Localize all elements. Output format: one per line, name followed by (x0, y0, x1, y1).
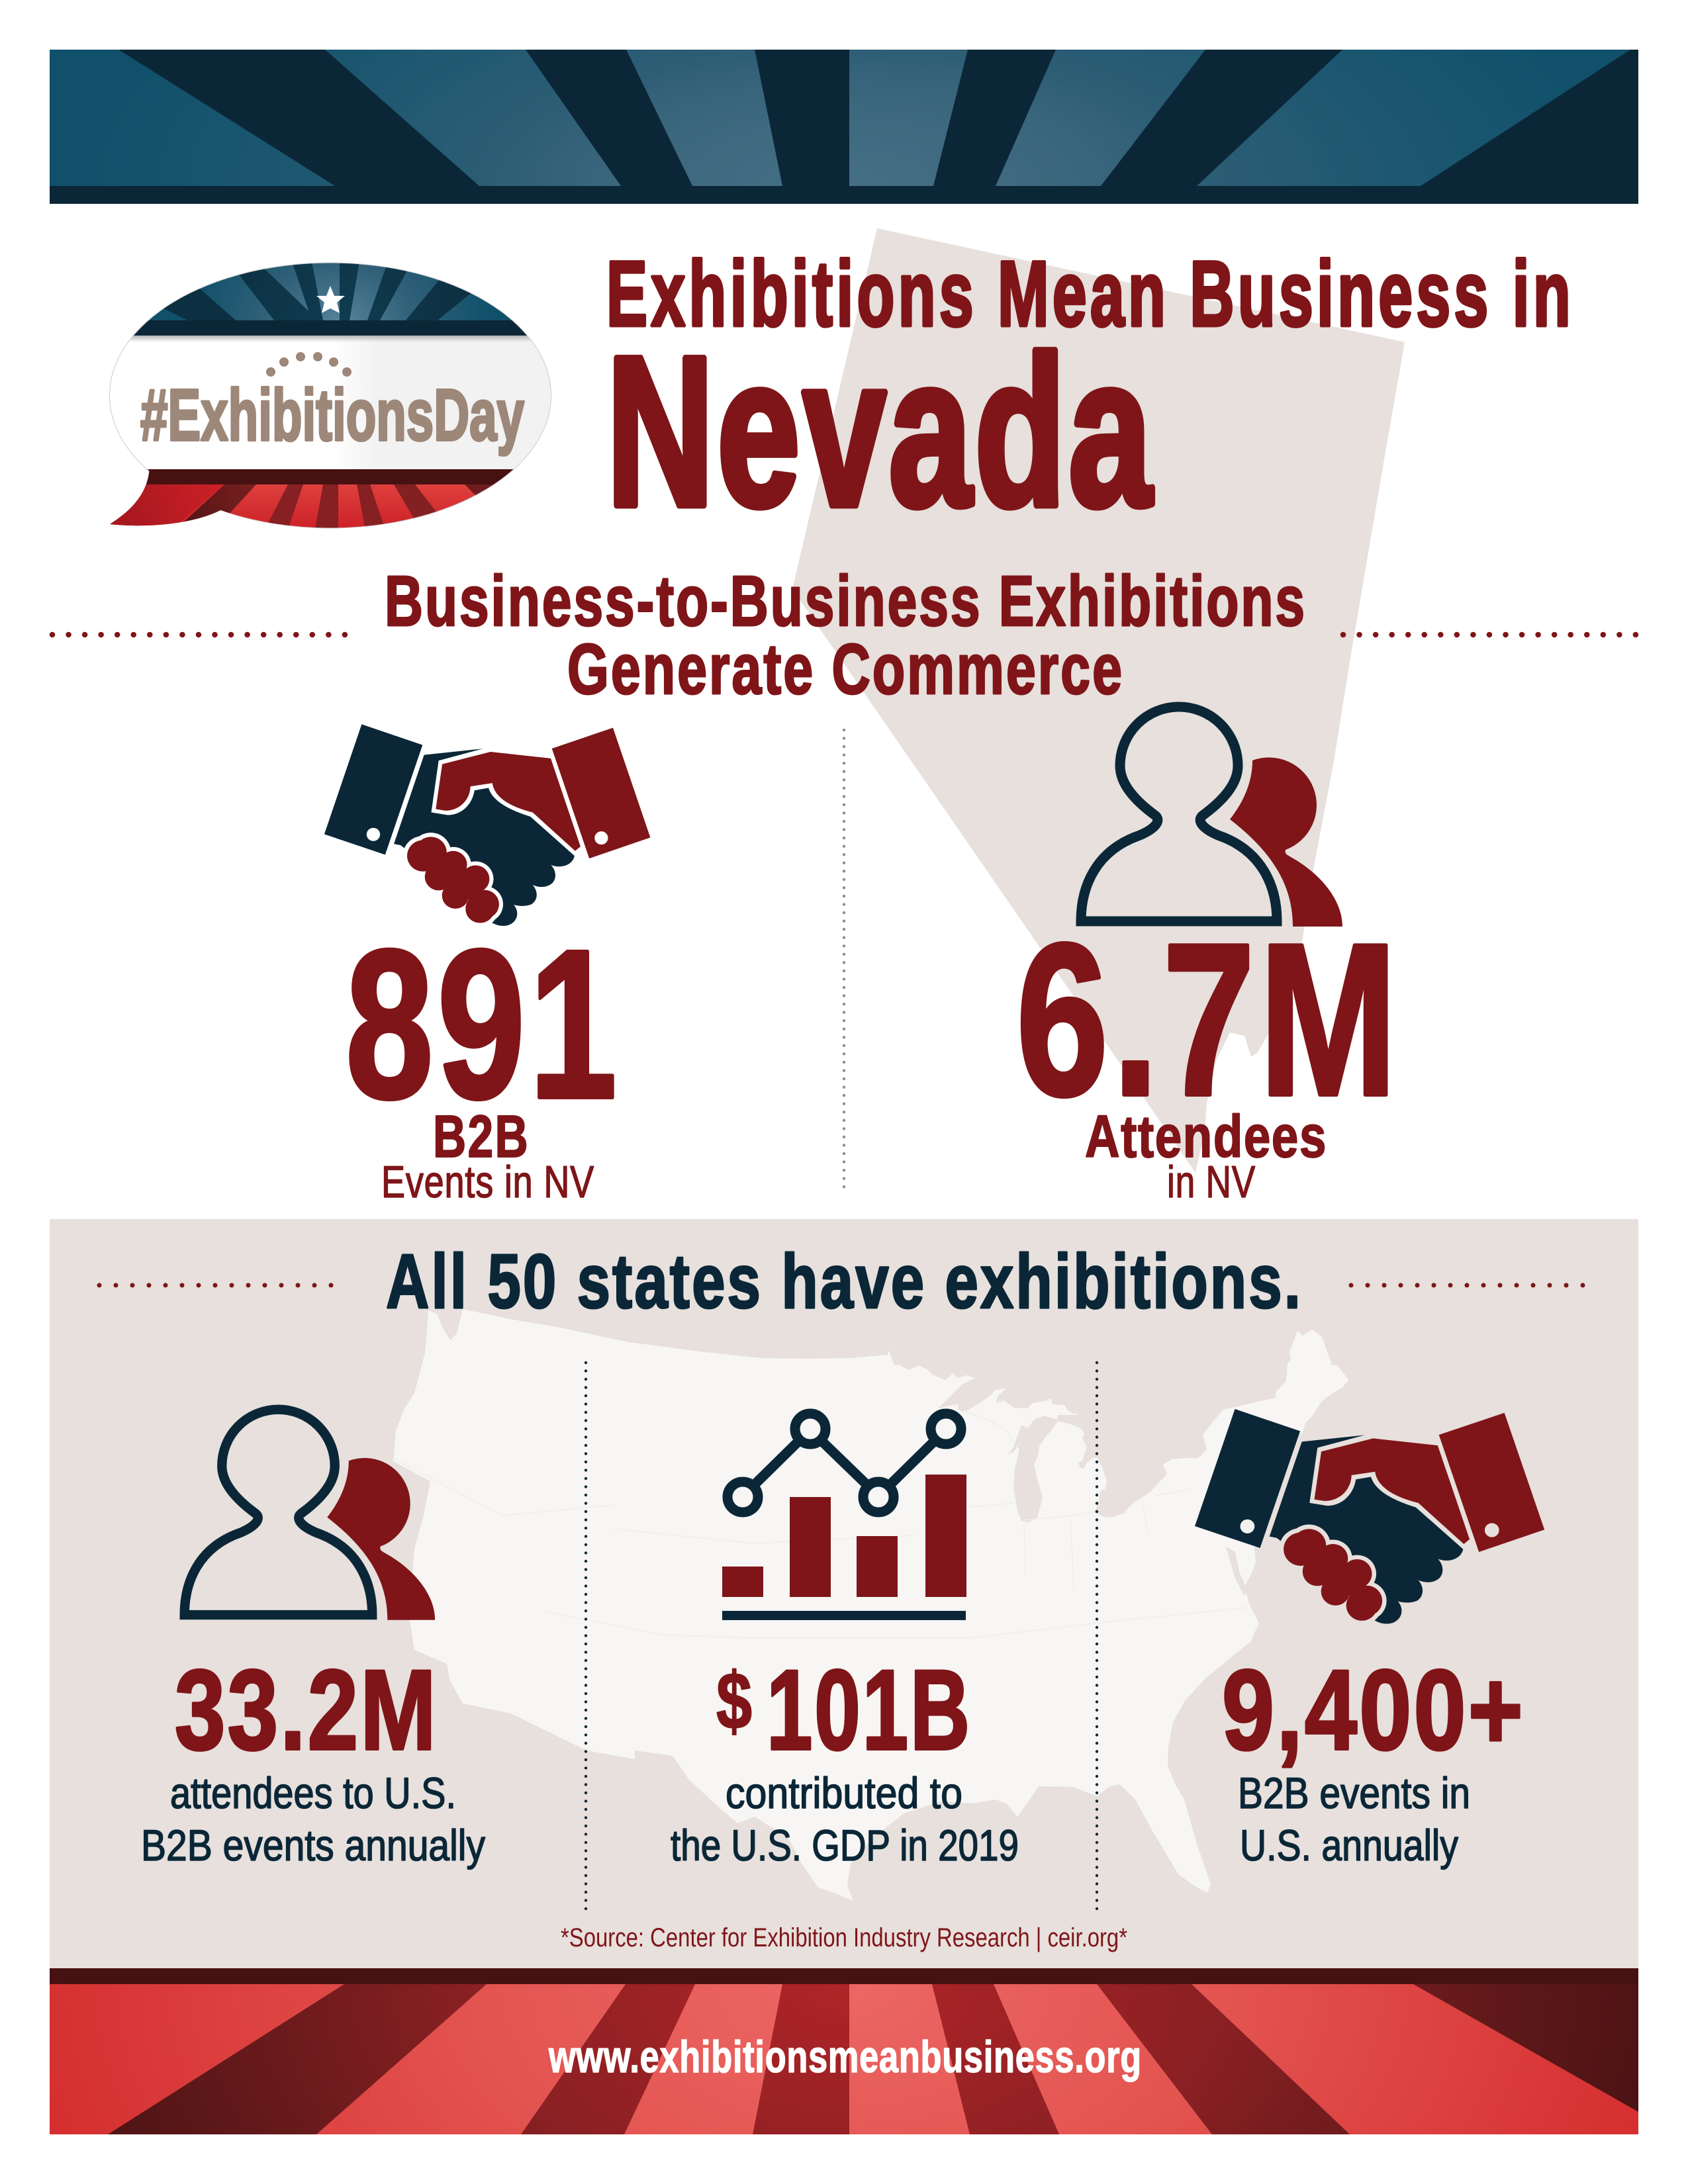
#ExhibitionsDay speech bubble badge (106, 261, 556, 533)
dotted divider left (52, 632, 346, 637)
stat: 891 B2B events in NV: Events in NV (381, 1157, 594, 1207)
stat: 9,400+ events (1222, 1647, 1525, 1870)
column divider left (585, 1363, 587, 1910)
website URL: www.exhibitionsmeanbusiness.org (548, 2032, 1142, 2082)
section heading: Business-to-Business Exhibitions (385, 561, 1307, 641)
dotted divider left (99, 1283, 332, 1288)
hashtag text: #ExhibitionsDay (140, 375, 524, 456)
stat: 9,400+ events: 9,400+ (1222, 1647, 1525, 1774)
stat: 9,400+ events: U.S. annually (1240, 1821, 1458, 1870)
source note: *Source: Center for Exhibition Industry Research | ceir.org* (561, 1923, 1127, 1952)
stat: 6.7M attendees in NV: in NV (1167, 1157, 1256, 1207)
icon: people (U.S. attendees) (185, 1410, 435, 1620)
section heading (385, 561, 1307, 709)
stat: $101B GDP: contributed to (726, 1768, 962, 1817)
Nevada state silhouette (792, 228, 1405, 1173)
stat: $101B GDP: the U.S. GDP in 2019 (671, 1821, 1019, 1870)
dotted divider right (1351, 1283, 1584, 1288)
column divider right (1096, 1363, 1098, 1910)
stat: 891 B2B events in NV: 891 (346, 905, 621, 1142)
stat: 6.7M attendees in NV: 6.7M (1016, 898, 1401, 1141)
stat: $101B GDP (671, 1647, 1019, 1870)
stat: 6.7M attendees in NV (1016, 898, 1401, 1207)
stat: 33.2M attendees (141, 1647, 485, 1870)
stat: 33.2M attendees: B2B events annually (141, 1821, 485, 1870)
stat: $101B GDP: 101B (767, 1647, 972, 1774)
stat: $101B GDP: $ (716, 1656, 752, 1746)
footer banner with red sunburst (50, 1968, 1638, 2134)
vertical dotted divider (843, 730, 845, 1189)
stat: 891 B2B events in NV (346, 905, 621, 1207)
top banner with blue sunburst (50, 50, 1638, 204)
section heading: Generate Commerce (567, 629, 1124, 709)
icon: star (316, 286, 345, 313)
panel: all 50 states (50, 1219, 1638, 1968)
stat: 9,400+ events: B2B events in (1238, 1768, 1470, 1817)
dotted divider right (1343, 632, 1636, 637)
white notch under the bubble tail (110, 510, 278, 529)
dotted arc above hashtag (266, 352, 352, 377)
stat: 33.2M attendees: 33.2M (175, 1647, 438, 1774)
stat: 891 B2B events in NV: B2B (433, 1104, 530, 1170)
icon: people (Nevada attendees) (1081, 707, 1342, 927)
stat: 33.2M attendees: attendees to U.S. (170, 1768, 456, 1817)
heading: all 50 states: All 50 states have exhibitions. (386, 1238, 1303, 1324)
stat: 6.7M attendees in NV: Attendees (1085, 1104, 1327, 1170)
title: Nevada: Nevada (606, 313, 1154, 551)
icon: bar chart with line (722, 1414, 966, 1620)
icon: handshake (U.S. events) (1195, 1409, 1544, 1625)
icon: handshake (Nevada events) (324, 724, 650, 927)
map of the United States (393, 1309, 1349, 1901)
